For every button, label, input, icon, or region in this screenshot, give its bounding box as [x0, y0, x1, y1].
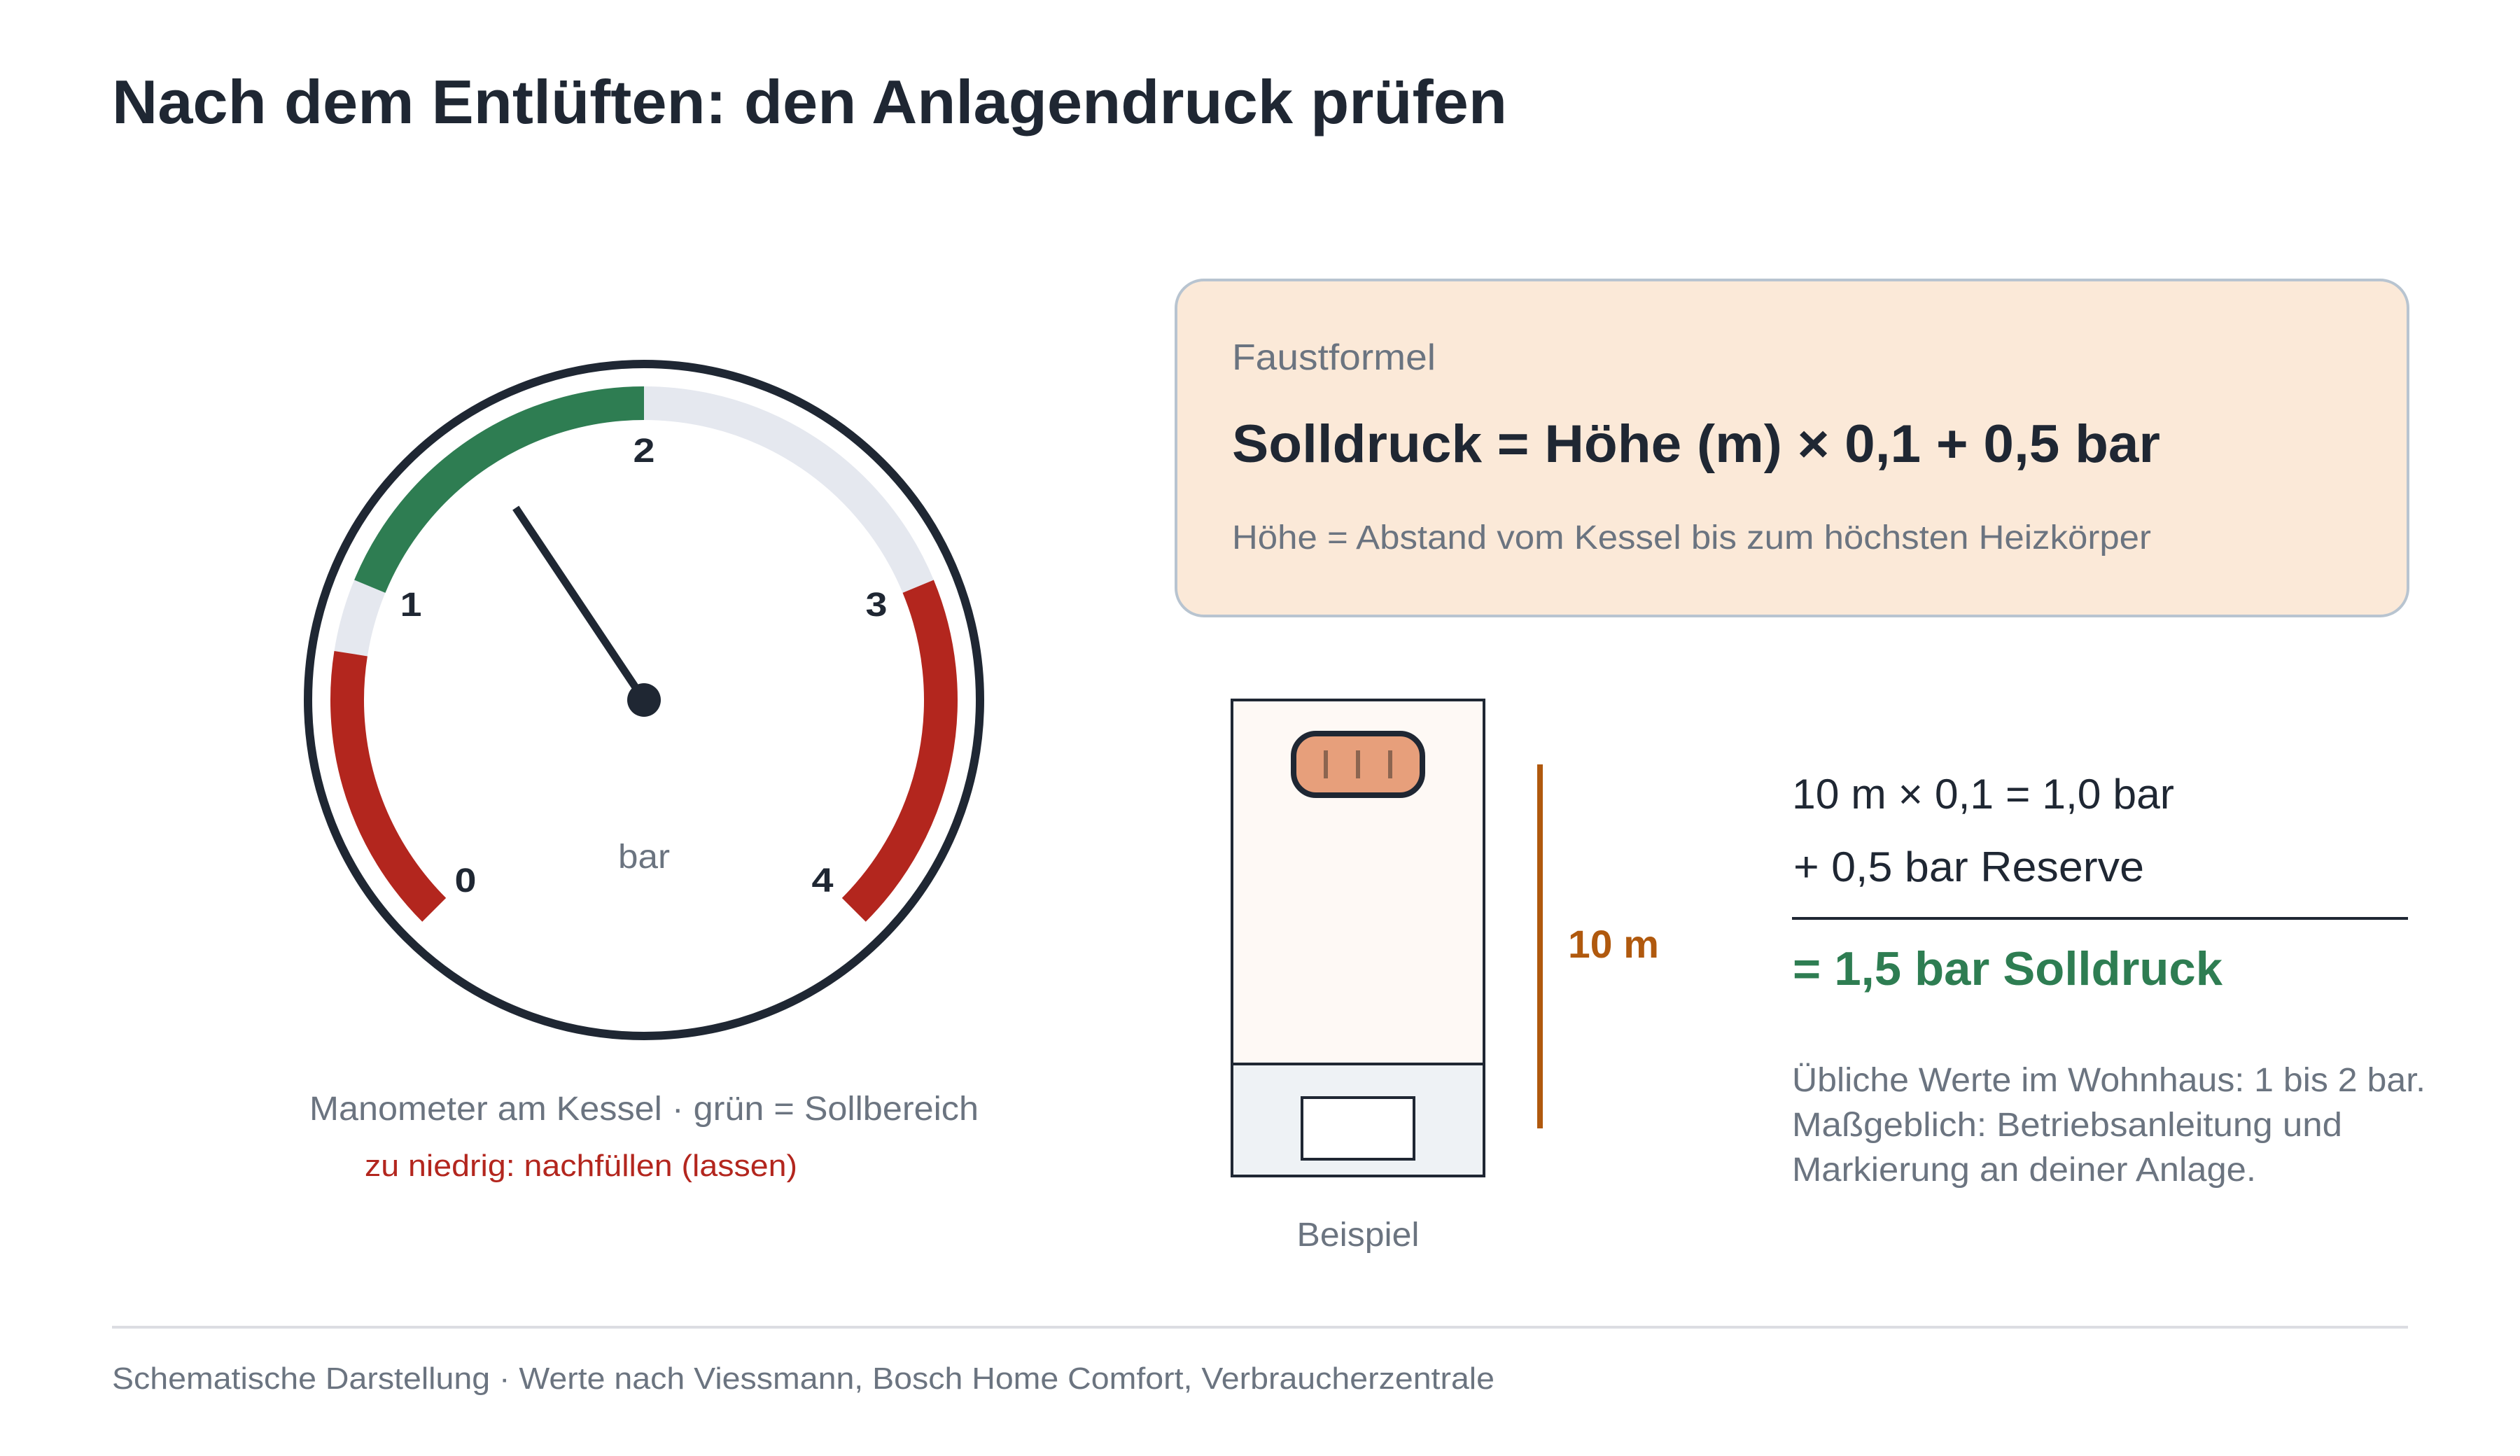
- unit label: bar: [618, 839, 670, 876]
- building basement area: [1232, 1064, 1484, 1176]
- building caption: Beispiel: [1296, 1217, 1420, 1254]
- needle: [516, 508, 644, 700]
- needle hub: [627, 683, 661, 717]
- scale labels: 2: [633, 433, 655, 470]
- result: = 1,5 bar Solldruck: [1793, 942, 2222, 995]
- gauge caption: Manometer am Kessel · grün = Sollbereich: [309, 1091, 979, 1128]
- gauge neutral track: [351, 403, 918, 654]
- title: Nach dem Entlüften: den Anlagendruck prüfen: [112, 67, 1507, 136]
- gauge low red zone: [347, 654, 434, 910]
- icon: boiler: [1302, 1098, 1414, 1159]
- note text: [1792, 1062, 2426, 1189]
- note text: Übliche Werte im Wohnhaus: 1 bis 2 bar.: [1792, 1062, 2426, 1099]
- scale labels: 4: [812, 862, 834, 899]
- panel: pressure gauge: [308, 364, 980, 1036]
- card label: Faustformel: [1232, 337, 1436, 378]
- gauge high red zone: [854, 587, 941, 910]
- panel: rule of thumb card: [1176, 280, 2408, 616]
- building upper floor area: [1232, 700, 1484, 1064]
- note text: Markierung an deiner Anlage.: [1792, 1152, 2256, 1189]
- card background: [1176, 280, 2408, 616]
- note text: Maßgeblich: Betriebsanleitung und: [1792, 1107, 2342, 1144]
- panel: building example: [1232, 700, 1659, 1254]
- gauge dial ring: [308, 364, 980, 1036]
- panel: calculation: [1792, 771, 2426, 1189]
- icon: radiator: [1294, 734, 1422, 795]
- low pressure note: zu niedrig: nachfüllen (lassen): [365, 1149, 797, 1183]
- scale labels: [400, 433, 888, 899]
- sum divider: [1792, 917, 2408, 920]
- height marker line: [1537, 764, 1543, 1128]
- footer source note: Schematische Darstellung · Werte nach Viessmann, Bosch Home Comfort, Verbraucherzentrale: [112, 1362, 1494, 1396]
- formula: Solldruck = Höhe (m) × 0,1 + 0,5 bar: [1232, 414, 2160, 474]
- scale labels: 1: [400, 587, 421, 624]
- gauge green target zone: [370, 403, 644, 587]
- calculation line one: 10 m × 0,1 = 1,0 bar: [1792, 771, 2174, 818]
- scale labels: 3: [865, 587, 888, 624]
- height label: 10 m: [1568, 922, 1659, 966]
- calculation line two: + 0,5 bar Reserve: [1793, 844, 2144, 890]
- scale labels: 0: [455, 862, 476, 899]
- formula explanation: Höhe = Abstand vom Kessel bis zum höchsten Heizkörper: [1232, 519, 2151, 556]
